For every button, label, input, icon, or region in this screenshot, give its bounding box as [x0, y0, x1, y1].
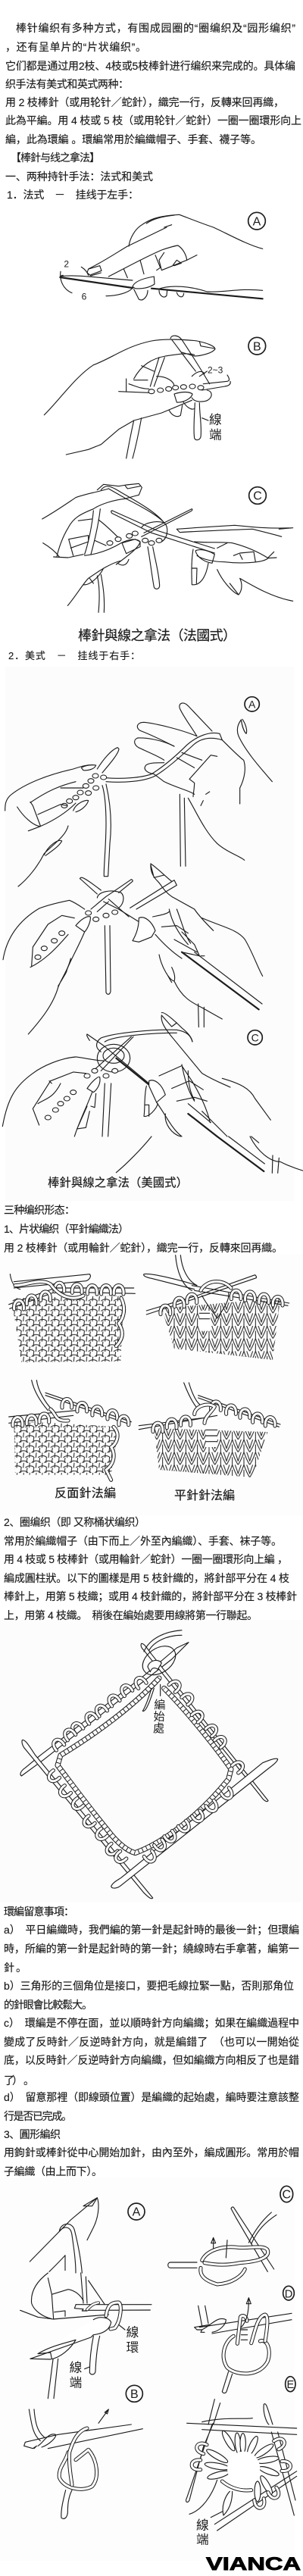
intro text block: 一、两种持针手法：法式和美式	[5, 170, 153, 183]
notes text block: 的針眼會比較鬆大。	[4, 1999, 92, 2011]
badge A	[245, 697, 259, 711]
needle: lower right	[111, 1758, 278, 1888]
label 線環: 環	[127, 2340, 139, 2355]
section text: flat knitting	[4, 1204, 283, 1254]
notes text block: 行是否已完成。	[4, 2110, 72, 2122]
notes text block: 時，所編的第一針是起針時的第一針；繞線時右手拿著，編第一	[4, 1943, 299, 1955]
diagram: four needles forming a diamond	[20, 1630, 278, 1899]
illustration: American method step A	[5, 697, 272, 886]
brand logo: VIANCA	[206, 2554, 301, 2574]
badge C: C	[253, 490, 262, 503]
badge B	[126, 2385, 142, 2402]
section text: circular knitting: 上，用第 4 枝織。 稍後在編始處要用線將第一行聯起。	[4, 1609, 258, 1621]
badge A: A	[133, 2206, 141, 2219]
badge C	[248, 1030, 262, 1045]
caption: American method: 棒針與線之拿法（美國式）	[48, 1175, 188, 1190]
notes text block: 針 。	[4, 1962, 27, 1974]
swatch: reverse stitch on needles, top	[9, 1274, 135, 1362]
illustration: crochet step C	[168, 2186, 293, 2284]
notes text block: 變成了反時針／反逆時針方向，就是編錯了 （也可以一開始從	[4, 2036, 299, 2048]
number label 6: 6	[82, 291, 87, 302]
swatch: stockinette, bottom	[139, 1383, 280, 1477]
badge E	[286, 2377, 295, 2392]
section text: circular knitting: 常用於編織帽子（由下而上／外至內編織）、手套、袜子等。	[4, 1535, 282, 1547]
illustration: crochet step D	[195, 2286, 295, 2393]
intro text block	[5, 22, 301, 201]
section text: flat knitting: 1、片状编织（平針編織法）	[4, 1223, 129, 1235]
notes text block: 底，以反時針／反逆時針方向編織，但如編織方向相反了也是錯	[4, 2054, 299, 2066]
notes text block: 3、圓形編织	[4, 2128, 61, 2140]
label 線端	[196, 2518, 209, 2546]
notes text block: d） 留意那裡（即線頭位置）是編織的起始處，編時要注意該整	[4, 2091, 299, 2103]
section text: circular knitting	[4, 1516, 297, 1621]
label 線端: 端	[70, 2376, 82, 2390]
badge C: C	[251, 1031, 259, 1043]
badge C	[249, 487, 266, 504]
intro text block: 织手法有美式和英式两种：	[5, 78, 129, 90]
swatch: stockinette on needles, top	[144, 1255, 289, 1360]
notes text block: c） 環編是不停在面，並以順時針方向編織；如果在編織過程中	[4, 2017, 299, 2030]
notes text block: 了） 。	[4, 2074, 34, 2087]
needle: lower left	[22, 1740, 153, 1899]
illustration: crochet step B, slip knot	[24, 2409, 142, 2518]
illustration: French method step B	[44, 336, 266, 458]
illustration: crochet step A, yarn over hand	[20, 2198, 152, 2402]
illustration: crochet step E, circle of stitches	[186, 2399, 297, 2546]
background panel: circular needles diagram	[0, 1620, 301, 1902]
background panel: American method	[5, 667, 294, 1201]
intro text block: 1．法式 － 挂线于左手：	[7, 189, 139, 201]
badge B	[248, 337, 266, 355]
badge D: D	[285, 2288, 292, 2300]
badge A: A	[253, 215, 261, 228]
label 線端	[209, 412, 222, 442]
section text: flat knitting: 三种编织形态：	[4, 1204, 75, 1216]
illustration: French method step A	[60, 212, 265, 302]
label 線端: 線	[209, 412, 222, 427]
label 線端: 端	[209, 427, 222, 442]
label 編始處: 編	[154, 1699, 165, 1712]
swatch: reverse stitch, bottom	[9, 1380, 131, 1480]
badge A	[248, 212, 265, 230]
label 2~3: 2~3	[208, 365, 223, 376]
intro text block: 棒针编织有多种方式，有围成园圈的“圈编织及“园形编织”	[16, 22, 295, 34]
section text: circular knitting: 編成圓柱狀。以下的圖樣是用 5 枝針織的，將針部平分在 4 枝	[4, 1572, 289, 1584]
section text: circular knitting: 用 4 枝或 5 枝棒針（或用輪針／蛇針）一圈一圈環形向上編 ，	[4, 1553, 288, 1565]
badge E: E	[286, 2379, 294, 2391]
badge B: B	[130, 2388, 139, 2401]
label 編始處	[153, 1699, 165, 1735]
intro text block: ，还有呈单片的“片状编织”。	[5, 41, 146, 53]
illustration: French method step C	[42, 483, 293, 612]
label 編始處: 處	[153, 1722, 164, 1735]
label 線環	[127, 2325, 139, 2355]
label 線端	[70, 2361, 83, 2390]
badge D	[283, 2286, 294, 2300]
notes text block: b）三角形的三個角位是接口，要把毛線拉緊一點，否則那角位	[4, 1980, 294, 1992]
intro text block: 此為平編。用 4 枝或 5 枝（或用轮针／蛇針）一圈一圈環形向上	[5, 114, 301, 127]
caption: reverse stitch: 反面針法編	[55, 1487, 116, 1500]
section text: circular knitting: 棒針上，用第 5 枝織；或用 4 枝針織的，將針部平分在 3 枝棒針	[4, 1590, 297, 1603]
section text: flat knitting: 用 2 枝棒針（或用輪針／蛇針），織完一行，反轉來回再織。	[4, 1242, 283, 1254]
intro text block: 它们都是通过用2枝、4枝或5枝棒針进行编织来完成的。具体编	[5, 60, 295, 72]
intro text block: 【棒針与线之拿法】	[11, 152, 100, 164]
number label 2: 2	[64, 259, 69, 270]
badge A: A	[248, 698, 256, 710]
notes text block: 子編織（由上而下）。	[4, 2165, 102, 2177]
needle: upper left	[20, 1643, 189, 1776]
caption: stockinette stitch: 平針針法編	[174, 1489, 235, 1502]
needle: upper right	[141, 1643, 268, 1802]
section text: circular knitting: 2、圈编织（即 又称桶状编织）	[4, 1516, 145, 1528]
badge B: B	[253, 340, 261, 353]
illustration: American method step B	[3, 864, 263, 1034]
badge C: C	[283, 2189, 291, 2202]
heading: American method: 2．美式 － 挂线于右手：	[8, 650, 140, 661]
notes text block: a） 平日編織時，我們編的第一針是起針時的最後一針；但環編	[4, 1924, 299, 1937]
label 編始處: 始	[154, 1711, 165, 1724]
notes text block: 環編留意事項：	[4, 1905, 74, 1918]
label 線端: 端	[196, 2532, 209, 2546]
badge A	[128, 2203, 145, 2220]
label 線端: 線	[196, 2518, 209, 2532]
intro text block: 編，此為環編 。環編常用於編織帽子、手套、襪子等。	[5, 133, 261, 145]
notes text block	[4, 1905, 299, 2177]
notes text block: 用鉤針或棒針從中心開始加針，由內至外，編成圓形。常用於帽	[4, 2146, 299, 2159]
caption: French method: 棒針與線之拿法（法國式）	[78, 627, 236, 643]
illustration: American method step C	[2, 1013, 303, 1173]
background panel: knit swatches	[0, 1254, 303, 1515]
label 線端: 線	[70, 2361, 83, 2375]
intro text block: 用 2 枝棒針（或用轮针／蛇針），織完一行，反轉来回再織，	[5, 96, 284, 108]
background panel: circular knitting steps	[0, 2178, 294, 2561]
badge C	[280, 2186, 293, 2202]
label 線環: 線	[127, 2325, 139, 2340]
